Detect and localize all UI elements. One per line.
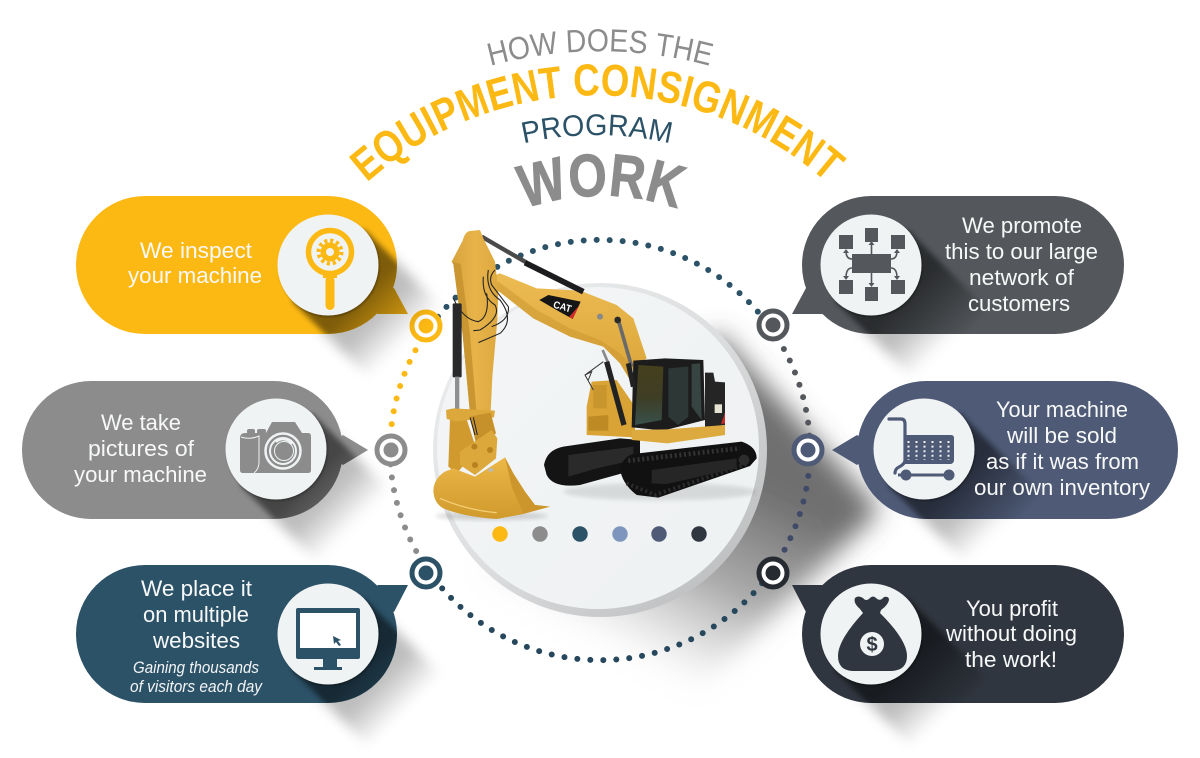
title: [349, 29, 847, 209]
label: We place it: [141, 576, 253, 601]
label: We take: [101, 410, 181, 435]
label: your machine: [128, 263, 262, 288]
label: on multiple: [143, 602, 249, 627]
cab windshield: [635, 365, 663, 425]
label: pictures of: [88, 436, 195, 461]
icon disc: [278, 584, 378, 684]
label: will be sold: [1006, 423, 1117, 448]
label: You profit: [966, 596, 1059, 621]
label: without doing: [945, 621, 1077, 646]
speech bubble: [76, 196, 408, 334]
label: [945, 596, 1077, 672]
node: profit: [759, 559, 787, 587]
label: network of: [969, 265, 1075, 290]
label: [130, 576, 263, 696]
icon disc: [820, 214, 922, 316]
arm cylinder barrel: [525, 263, 583, 292]
stick: [452, 230, 498, 413]
label: Your machine: [996, 397, 1128, 422]
label: as if it was from: [986, 449, 1139, 474]
speech bubble: [832, 381, 1178, 519]
second boom cylinder: [618, 320, 632, 367]
cat logo: [539, 295, 581, 319]
icon disc: [226, 398, 326, 500]
rear track: [544, 438, 640, 486]
label: customers: [968, 291, 1070, 316]
node: websites: [412, 559, 440, 587]
bucket cylinder barrel: [453, 303, 462, 377]
label: the work!: [965, 647, 1057, 672]
cat logo: CAT: [552, 300, 572, 315]
speech bubble: [76, 565, 408, 703]
dotted ring: [390, 240, 810, 660]
node: inspect: [412, 312, 440, 340]
label: We promote: [962, 213, 1082, 238]
panel: you profit without doing the work: [792, 565, 1124, 755]
icon disc: [278, 214, 378, 316]
icon disc: [820, 584, 922, 684]
panel: we place it on multiple websites: [76, 565, 434, 740]
side frame: [652, 458, 737, 484]
label: [974, 397, 1151, 500]
label: our own inventory: [974, 475, 1151, 500]
icon: money bag: $: [866, 634, 878, 656]
hydraulic hoses: [453, 270, 508, 343]
label: your machine: [74, 462, 207, 487]
label: [74, 410, 207, 487]
label: websites: [152, 628, 240, 653]
linkage: [446, 408, 497, 475]
icon: camera: [240, 422, 311, 473]
cab door window: [668, 367, 688, 425]
icon: shopping cart: [889, 419, 954, 480]
title line: how does the: HOW DOES THE: [487, 29, 714, 66]
label: We inspect: [140, 238, 253, 263]
label: Gaining thousands: [133, 658, 259, 677]
panel: we promote this to our large network: [792, 196, 1124, 386]
label: [128, 238, 262, 288]
speech bubble: [22, 381, 368, 519]
title line: program: PROGRAM: [522, 114, 672, 143]
speech bubble: [792, 196, 1124, 334]
panel: your machine will be sold: [832, 381, 1178, 570]
icon: monitor: [296, 608, 360, 670]
label: this to our large: [945, 239, 1098, 264]
title line: equipment consignment: EQUIPMENT CONSIGNMENT: [349, 64, 847, 181]
pagination dots: [492, 526, 707, 542]
node: inventory: [794, 436, 822, 464]
cab: [632, 358, 705, 431]
label: of visitors each day: [130, 677, 263, 696]
icon disc: [874, 398, 974, 500]
bucket cylinder rod: [455, 377, 459, 410]
central disc long shadow: [482, 332, 880, 735]
icon: magnifier with gear: [308, 230, 352, 310]
boom cylinder: [603, 350, 608, 363]
icon: money bag: [838, 596, 907, 671]
speech bubble: [792, 565, 1124, 703]
title line: work: WORK: [514, 154, 688, 209]
front track: [620, 442, 757, 498]
node: pictures: [377, 436, 405, 464]
cab side window: [692, 363, 702, 420]
panel: we inspect your machine: [76, 196, 434, 371]
node: promote: [759, 311, 787, 339]
icon: network diagram: [839, 228, 905, 301]
rear housing: [705, 373, 725, 427]
bucket: [433, 457, 550, 519]
label: [945, 213, 1098, 316]
handrail: [585, 362, 603, 390]
excavator: [433, 230, 757, 520]
arm cylinder rod: [482, 237, 527, 263]
engine compartment: [587, 380, 635, 437]
upper frame: [632, 425, 725, 443]
boom: [491, 273, 647, 380]
panel: we take pictures of your machine: [22, 381, 382, 555]
central disc: [433, 283, 767, 617]
